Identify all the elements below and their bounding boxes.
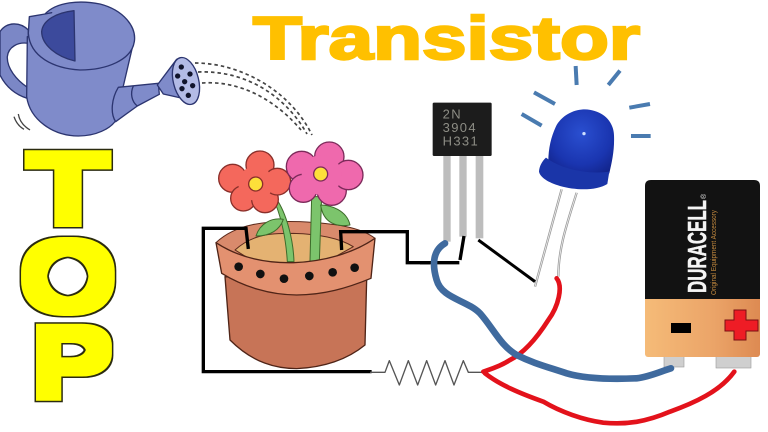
LED with light rays <box>420 66 651 287</box>
nozzle holes <box>175 64 195 98</box>
wires from pot probes <box>203 228 430 372</box>
battery <box>645 180 760 368</box>
rim holes <box>234 262 359 283</box>
LED leads <box>535 189 577 287</box>
pot back rim <box>216 221 375 263</box>
motion marks <box>14 113 30 130</box>
can body <box>27 37 133 136</box>
nozzle face <box>168 55 204 107</box>
vertical heading: TOP: P <box>32 307 112 419</box>
small caption: Original Equipment Accessory <box>711 210 718 295</box>
transistor markings <box>443 107 479 148</box>
can opening <box>42 11 75 61</box>
can handle <box>0 24 28 98</box>
light rays <box>522 66 651 136</box>
black wires to transistor <box>420 236 535 282</box>
pink flower <box>286 142 363 205</box>
transistor body <box>433 103 492 156</box>
icon: watering can <box>0 2 204 136</box>
plus sign <box>725 310 758 340</box>
battery copper base <box>645 296 760 357</box>
soil <box>235 233 353 263</box>
can rim top <box>28 2 135 70</box>
minus sign <box>671 323 691 333</box>
battery terminals <box>664 355 751 368</box>
stems and leaves <box>256 197 350 262</box>
transistor legs <box>443 155 483 242</box>
LED dome <box>548 109 614 178</box>
vertical heading: TOP: O <box>20 221 116 333</box>
red flower <box>219 151 291 213</box>
nozzle cone <box>157 59 190 100</box>
battery black top <box>645 180 760 299</box>
water droplets arcs <box>195 63 312 135</box>
resistor <box>370 361 483 385</box>
pot rim band <box>216 238 375 295</box>
transistor 2N3904 <box>433 103 492 242</box>
LED highlight <box>582 132 586 135</box>
pot body <box>225 277 367 369</box>
red wires <box>483 278 734 423</box>
LED collar <box>539 158 609 189</box>
brand name: DURACELL <box>682 200 712 293</box>
title: Transistor <box>253 5 640 72</box>
vertical heading: TOP <box>20 133 116 419</box>
blue wire <box>434 243 671 379</box>
transistor markings: 2N <box>443 107 462 122</box>
spout <box>112 83 159 122</box>
transistor markings: 3904 <box>443 120 477 135</box>
registered mark: ® <box>700 193 708 199</box>
flower pot with flowers <box>203 142 430 372</box>
transistor markings: H331 <box>443 133 479 148</box>
vertical heading: TOP: T <box>27 133 109 245</box>
